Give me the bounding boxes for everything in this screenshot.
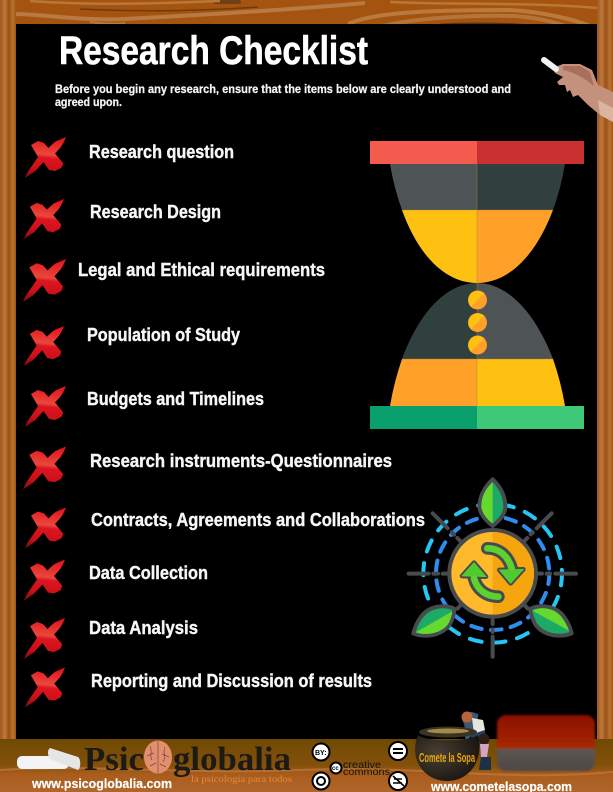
leaf right	[530, 606, 572, 636]
icon: recycling emblem with leaves	[409, 479, 576, 657]
bottom bar	[370, 406, 584, 429]
dashed rings	[423, 504, 562, 643]
intro text	[55, 82, 511, 109]
icon: cooking pot with children: Comete la Sopa	[419, 750, 475, 765]
checklist items: Contracts, Agreements and Collaborations	[91, 510, 425, 530]
checklist items: Legal and Ethical requirements	[78, 260, 325, 280]
checklist marks	[23, 137, 66, 708]
disc	[449, 530, 536, 617]
footer wood band	[0, 739, 613, 792]
icon: eraser	[497, 715, 595, 771]
checklist items: Data Collection	[89, 563, 208, 583]
icon: hand holding chalk	[544, 60, 613, 122]
title: Research Checklist	[59, 29, 368, 73]
checklist items: Population of Study	[87, 325, 240, 345]
hourglass	[370, 141, 584, 429]
checklist items: Research Design	[90, 202, 221, 222]
checklist items: Research instruments-Questionnaires	[90, 451, 392, 471]
logo: Psicoglobalia: la psicología para todos	[191, 774, 293, 784]
logo: Psicoglobalia: globalia	[173, 741, 291, 778]
creative commons badges	[312, 742, 407, 790]
leaf top	[479, 479, 505, 526]
sand drops	[468, 290, 487, 354]
creative commons badges: creative	[343, 759, 381, 771]
radial ticks	[409, 513, 576, 657]
icon: brain	[144, 740, 172, 774]
logo: Psicoglobalia	[84, 740, 293, 784]
arrows	[462, 548, 523, 597]
logo: Psicoglobalia: Psic	[84, 741, 144, 778]
checklist items: Budgets and Timelines	[87, 389, 264, 409]
creative commons badges: cc	[332, 766, 339, 772]
upper bulb	[390, 164, 565, 283]
creative commons badges: commons	[343, 766, 390, 778]
icon: cooking pot with children	[415, 712, 491, 781]
website left: www.psicoglobalia.com	[31, 776, 172, 791]
leaf left	[413, 606, 454, 636]
creative commons badges: BY:	[315, 750, 327, 757]
intro text: agreed upon.	[55, 95, 122, 109]
checklist items: Research question	[89, 142, 234, 162]
checklist items: Reporting and Discussion of results	[91, 671, 372, 691]
top bar	[370, 141, 584, 164]
intro text: Before you begin any research, ensure that the items below are clearly understood and	[55, 82, 511, 96]
checklist items: Data Analysis	[89, 618, 198, 638]
checklist items	[78, 142, 425, 691]
lower bulb	[390, 283, 565, 406]
icon: chalk pieces	[17, 748, 80, 770]
